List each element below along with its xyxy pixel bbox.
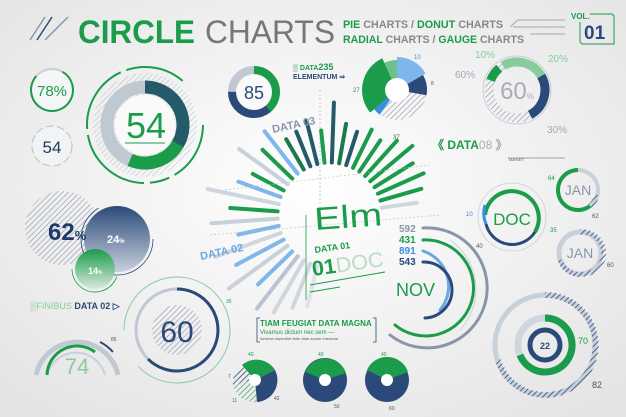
bubbles: 62/24/14: 62%	[48, 219, 87, 246]
subtitle: RADIAL CHARTS / GAUGE CHARTS	[343, 34, 524, 46]
pie: 40/42	[228, 352, 280, 404]
radial bars: NOV: 592	[399, 224, 416, 235]
pie: 40/42: 7	[228, 374, 231, 380]
gauge: 74: 74	[65, 354, 89, 379]
pie chart: 27	[353, 88, 360, 94]
text: Elm block: 01DOC	[310, 248, 385, 281]
label: DATA08: 《 DATA08 》	[432, 137, 508, 152]
donut: big 54: 54	[126, 105, 166, 146]
bubbles: 62/24/14: 24%	[107, 234, 125, 246]
text: Elm block: Elm	[313, 196, 383, 237]
vol badge: VOL.	[571, 12, 590, 21]
label: DATA 03: DATA 03	[271, 115, 316, 136]
pie: 40/50: 50	[334, 404, 340, 410]
donut: 85	[223, 61, 285, 123]
gauge: JAN 2	[559, 232, 614, 275]
radial bars: NOV: 891	[399, 246, 416, 257]
pie: 40/60: 40	[381, 352, 387, 358]
radial bars: NOV: 431	[399, 235, 416, 246]
donut: 60%	[455, 50, 568, 136]
bubbles: 62/24/14: 14%	[88, 266, 103, 276]
gauge: DOC: DOC	[493, 210, 531, 229]
pie: 40/50: 40	[318, 352, 324, 358]
donut: 85: 85	[244, 83, 264, 103]
gauge: DOC	[466, 157, 565, 251]
gauge: JAN 2: JAN	[567, 245, 593, 261]
gauge: 74: 85	[111, 337, 117, 343]
pie: 40/60: 60	[389, 406, 395, 412]
pie: 40/60	[365, 352, 409, 412]
title: CIRCLE	[78, 14, 195, 50]
pie: 40/42: 42	[274, 396, 280, 402]
pie chart	[353, 55, 434, 141]
bubbles: 62/24/14	[25, 191, 153, 300]
circle: 54 small	[32, 126, 72, 166]
title: CHARTS	[205, 14, 335, 50]
text: Elm block: DATA 01	[314, 240, 351, 255]
label: DATA235 ELEMENTUM: ELEMENTUM ⇒	[293, 74, 345, 81]
donut: 78%	[23, 61, 81, 119]
text block: TIAM FEUGIAT: TIAM FEUGIAT DATA MAGNA	[260, 319, 372, 328]
label: DATA235 ELEMENTUM	[293, 62, 345, 230]
donut: big 54	[87, 67, 203, 183]
title	[30, 14, 335, 50]
donut: 60%: 30%	[547, 125, 567, 136]
pie: 40/42: 40	[248, 352, 254, 358]
gauge: 74	[36, 337, 118, 379]
donut: 60: 35	[226, 299, 232, 305]
radial bars: NOV: NOV	[396, 280, 435, 300]
circle: 54 small: 54	[43, 138, 61, 157]
label: FINIBUS DATA 02: ▒FINIBUS DATA 02 ▷	[30, 301, 121, 312]
donut: 60%: 10%	[475, 50, 495, 61]
gauge: DOC: 40	[476, 244, 483, 250]
subtitle	[343, 19, 565, 46]
gauge: JAN 1: JAN	[565, 182, 591, 198]
vol badge	[571, 12, 614, 44]
text block: TIAM FEUGIAT	[257, 318, 376, 342]
text: Elm block	[210, 165, 440, 300]
donut: 78%: 78%	[37, 83, 67, 100]
radial bars: NOV: 543	[399, 257, 416, 268]
donut: 22/70/82: 22	[540, 341, 550, 351]
donut: 22/70/82: 70	[578, 336, 588, 346]
donut: 60	[116, 269, 238, 391]
gauge: JAN 1	[548, 170, 599, 220]
label: DATA235 ELEMENTUM: ▒ DATA235	[293, 62, 333, 72]
pie chart: 8	[431, 81, 434, 87]
gauge: DOC: 10	[466, 212, 473, 218]
radial sunburst	[208, 103, 424, 312]
vol badge: 01	[584, 23, 606, 44]
subtitle: PIE CHARTS / DONUT CHARTS	[343, 19, 503, 31]
gauge: JAN 2: 60	[607, 263, 614, 269]
gauge: DOC: TARGET	[508, 157, 524, 162]
radial bars: NOV	[390, 224, 487, 348]
pie chart: 10	[414, 55, 421, 61]
gauge: JAN 1: 62	[592, 214, 599, 220]
gauge: DOC: 35	[550, 228, 557, 234]
gauge: JAN 1: 64	[548, 176, 555, 182]
pie: 40/42: 11	[232, 398, 237, 404]
donut: 60: 60	[160, 316, 194, 349]
pie chart: 37	[393, 135, 400, 141]
donut: 60%: 60%	[455, 70, 475, 81]
donut: 22/70/82: 82	[592, 380, 602, 390]
pie: 40/50	[303, 352, 347, 410]
text block: TIAM FEUGIAT: Vivamus dictum nec sem —	[260, 330, 334, 336]
label: DATA 02: DATA 02	[199, 242, 244, 263]
donut: 60%: 60%	[500, 78, 534, 105]
text block: TIAM FEUGIAT: Aenean imperdiet felis vitae auctor interdum	[260, 336, 339, 341]
donut: 22/70/82	[495, 295, 602, 395]
donut: 60%: 20%	[548, 54, 568, 65]
